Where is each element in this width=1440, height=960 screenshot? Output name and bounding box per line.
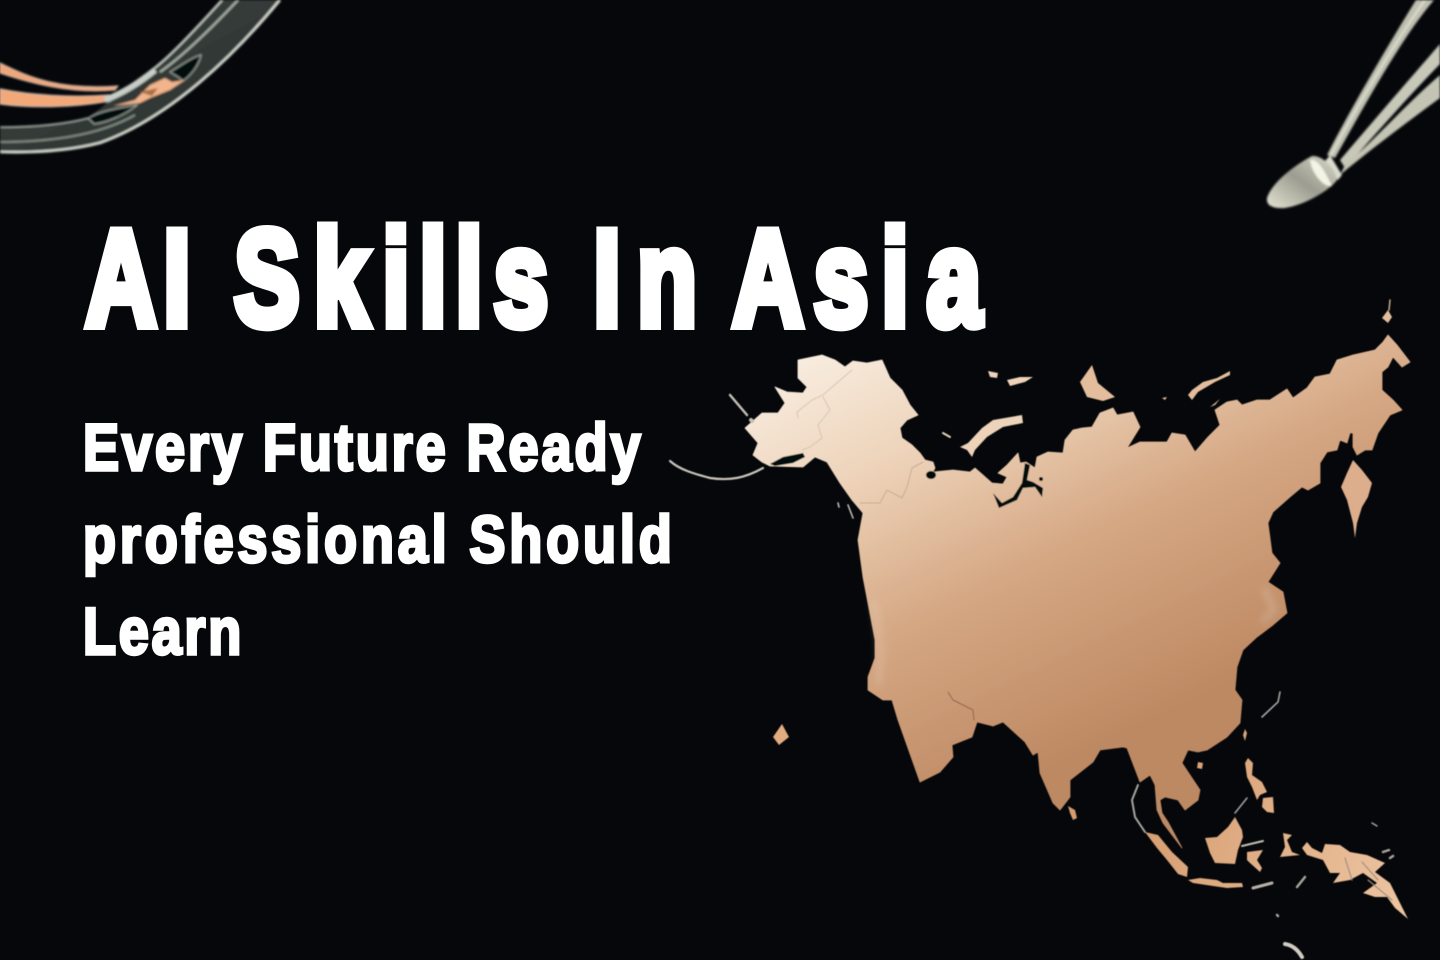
title: AI Skills In Asia	[86, 203, 982, 355]
decorative glass tube with orange strands, top left	[0, 0, 280, 152]
subtitle	[83, 410, 672, 668]
northern islands	[960, 371, 1033, 457]
eastern island	[1341, 460, 1372, 538]
subtitle: Every Future Ready	[83, 410, 641, 484]
map of Asia	[670, 300, 1410, 957]
southeast islands	[1068, 729, 1408, 919]
subtitle: Learn	[83, 594, 241, 668]
decorative metallic strands with bullet tip, top right	[1267, 0, 1440, 208]
subtitle: professional Should	[83, 502, 672, 576]
inland water	[770, 453, 1043, 508]
mainland	[745, 335, 1410, 848]
soft coastal highlights	[874, 588, 1274, 685]
southwest island	[773, 724, 789, 745]
fine coastal lines, borders and small islets	[670, 300, 1393, 957]
